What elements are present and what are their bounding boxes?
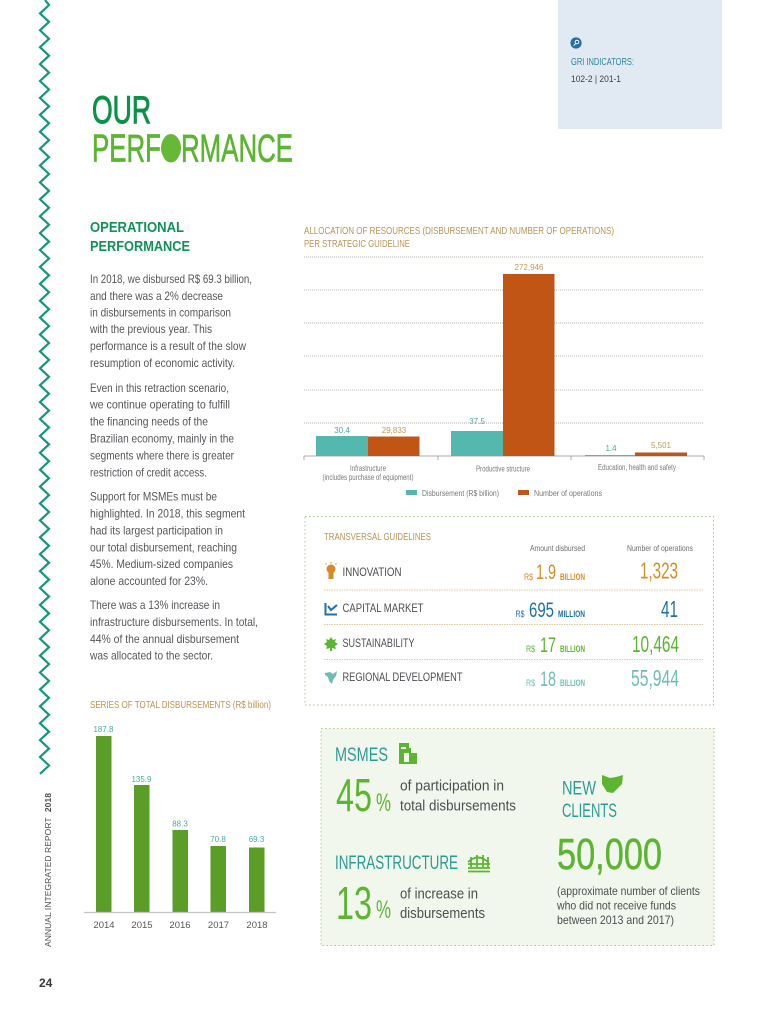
category labels: (includes purchase of equipment) (322, 473, 414, 482)
icon: light bulb (326, 562, 336, 579)
GRI codes: 102-2 | 201-1 (571, 74, 621, 85)
icon: leaf (324, 637, 338, 651)
panel: transversal guidelines (305, 516, 714, 705)
infrastructure block: of increase in (400, 886, 478, 902)
row: sustainability (324, 631, 679, 657)
icon: bridge (468, 855, 490, 872)
body text: was allocated to the sector. (89, 648, 213, 662)
body text (89, 272, 258, 662)
row: sustainability: BILLION (560, 644, 585, 654)
title: PERFORMANCE (92, 128, 293, 170)
value labels: 70.8 (210, 835, 226, 844)
body text: 45%. Medium-sized companies (90, 557, 233, 571)
icon: handshake (602, 775, 623, 793)
body text: we continue operating to fulfill (89, 398, 230, 412)
running footer: report name: ANNUAL INTEGRATED REPORT 2018 (43, 793, 53, 947)
body text: and there was a 2% decrease (90, 289, 223, 303)
body text: Support for MSMEs must be (90, 490, 217, 504)
body text: had its largest participation in (90, 524, 223, 538)
new clients block: NEW (562, 778, 596, 800)
bar chart: total disbursements (84, 725, 276, 931)
title (92, 89, 293, 170)
category labels (322, 463, 676, 482)
icon: magnifier badge (570, 37, 582, 49)
row: innovation: R$ (524, 572, 533, 582)
row: capital market: CAPITAL MARKET (342, 601, 424, 615)
bars: infrastructure (316, 426, 420, 456)
page number: 24 (39, 976, 53, 990)
new clients block (556, 775, 700, 927)
column headers: Amount disbursed (530, 543, 585, 553)
body text: performance is a result of the slow (90, 339, 246, 353)
chart heading: allocation of resources: PER STRATEGIC GUIDELINE (304, 239, 410, 250)
body text: Even in this retraction scenario, (90, 381, 229, 395)
body text: with the previous year. This (89, 322, 212, 336)
body text: in disbursements in comparison (90, 306, 231, 320)
new clients block: (approximate number of clients (557, 884, 700, 898)
year labels: 2018 (246, 920, 268, 931)
row: capital market: 695 (529, 599, 554, 622)
MSMEs block: % (376, 789, 391, 817)
new clients block: CLIENTS (562, 801, 617, 822)
row: sustainability: SUSTAINABILITY (342, 636, 414, 650)
chart heading: series of total disbursements: SERIES OF TOTAL DISBURSEMENTS (R$ billion) (90, 700, 271, 711)
row: regional development (325, 665, 679, 691)
category labels: Infrastructure (350, 464, 386, 473)
row: regional development: 55,944 (631, 665, 679, 691)
year labels: 2014 (93, 920, 115, 931)
bars: education, health and safety: 5,501 (651, 441, 672, 450)
body text: the financing needs of the (90, 414, 208, 428)
heading: operational performance: PERFORMANCE (90, 239, 190, 255)
body text: 44% of the annual disbursement (90, 632, 240, 646)
row: sustainability: 17 (540, 634, 556, 657)
bars: productive structure: 272,946 (515, 263, 544, 272)
legend (406, 488, 602, 498)
title: OUR (92, 89, 151, 132)
body text: resumption of economic activity. (90, 356, 235, 370)
value labels: 187.8 (93, 725, 114, 734)
category labels: Education, health and safety (598, 463, 676, 472)
value labels: 69.3 (249, 835, 265, 844)
row: regional development: 18 (540, 668, 556, 691)
row: capital market: R$ (516, 609, 524, 619)
new clients block: between 2013 and 2017) (557, 913, 674, 927)
body text: Brazilian economy, mainly in the (90, 432, 234, 446)
row: capital market: 41 (661, 596, 678, 622)
bars: education, health and safety: 1.4 (605, 444, 617, 453)
body text: highlighted. In 2018, this segment (90, 506, 246, 520)
panel: GRI indicators (558, 0, 722, 129)
heading: operational performance: OPERATIONAL (90, 220, 184, 236)
row: innovation (326, 558, 678, 584)
icon: map of Brazil (325, 671, 337, 684)
legend: Disbursement (R$ billion) (422, 488, 499, 498)
column headers (530, 543, 693, 553)
row: sustainability: R$ (526, 644, 535, 654)
value labels (93, 725, 265, 844)
row: regional development: REGIONAL DEVELOPMENT (342, 670, 463, 684)
value labels: 88.3 (172, 820, 188, 828)
infrastructure block (335, 853, 490, 929)
row: capital market (326, 596, 678, 622)
infrastructure block: INFRASTRUCTURE (335, 853, 458, 874)
GRI label: GRI INDICATORS: (571, 57, 634, 68)
bars: infrastructure: 29,833 (382, 426, 407, 435)
year labels (93, 920, 268, 931)
chart heading: allocation of resources (304, 226, 614, 250)
category labels: Productive structure (476, 464, 530, 474)
new clients block: who did not receive funds (556, 898, 676, 912)
MSMEs block: 45 (336, 769, 372, 821)
bar chart: allocation of resources (304, 257, 704, 498)
MSMEs block: total disbursements (400, 798, 516, 814)
bars: education, health and safety (585, 441, 687, 456)
row: capital market: MILLION (558, 609, 585, 619)
MSMEs block: MSMES (335, 745, 388, 766)
chart heading: allocation of resources: ALLOCATION OF RESOURCES (DISBURSEMENT AND NUMBER OF OPERATIONS) (304, 226, 614, 237)
body text: segments where there is greater (90, 448, 234, 462)
decorative zigzag border (40, 0, 49, 774)
year labels: 2016 (169, 920, 191, 931)
body text: There was a 13% increase in (90, 598, 220, 612)
infrastructure block: disbursements (400, 905, 485, 922)
body text: our total disbursement, reaching (90, 540, 237, 554)
body text: infrastructure disbursements. In total, (90, 615, 258, 629)
icon: seed-shaped letter O (161, 134, 181, 162)
row: innovation: BILLION (560, 572, 585, 582)
icon: buildings (399, 743, 417, 764)
bars: productive structure: 37.5 (469, 417, 485, 426)
heading: operational performance (90, 220, 190, 255)
new clients block: 50,000 (557, 830, 662, 879)
year labels: 2017 (208, 920, 229, 931)
row: innovation: INNOVATION (342, 565, 402, 579)
row: innovation: 1.9 (536, 561, 556, 584)
column headers: Number of operations (627, 543, 693, 553)
infrastructure block: 13 (336, 877, 372, 929)
body text: alone accounted for 23%. (90, 574, 208, 588)
body text: restriction of credit access. (90, 466, 207, 480)
row: sustainability: 10,464 (632, 631, 679, 657)
row: regional development: R$ (526, 678, 535, 688)
row: regional development: BILLION (560, 678, 585, 688)
body text: In 2018, we disbursed R$ 69.3 billion, (90, 272, 252, 286)
row: innovation: 1,323 (640, 558, 678, 584)
MSMEs block: of participation in (400, 778, 504, 794)
bars: infrastructure: 30.4 (334, 426, 350, 435)
bars: productive structure (451, 263, 554, 456)
value labels: 135.9 (131, 775, 152, 784)
table heading: TRANSVERSAL GUIDELINES (324, 532, 431, 543)
MSMEs block (335, 743, 516, 821)
icon: chart (326, 603, 337, 614)
year labels: 2015 (131, 920, 153, 931)
panel: highlights (321, 728, 714, 946)
infrastructure block: % (376, 896, 391, 924)
legend: Number of operations (534, 488, 602, 498)
